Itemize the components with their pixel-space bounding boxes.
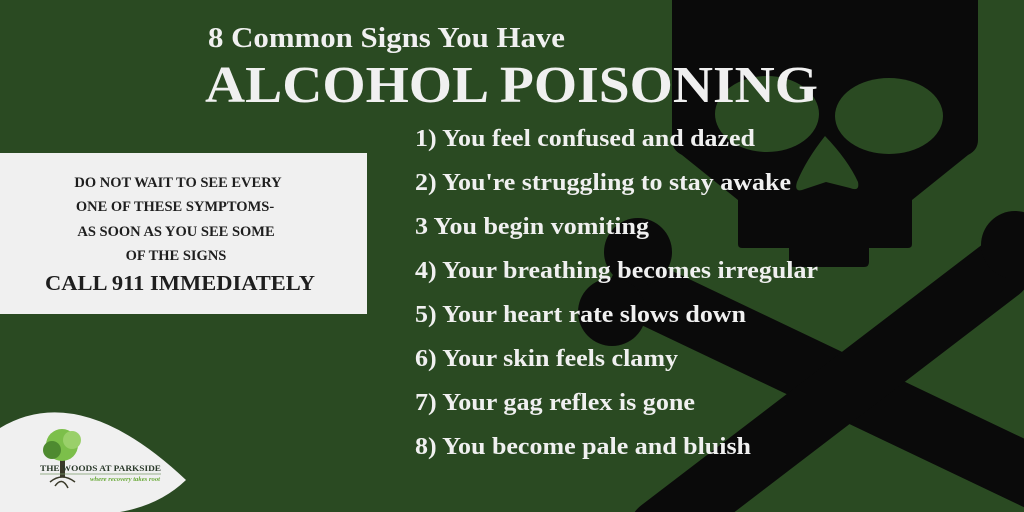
callout: warning box: ONE OF THESE SYMPTOMS- [76,199,274,215]
title: main heading: ALCOHOL POISONING [205,57,818,114]
logo: The Woods at Parkside: THE WOODS AT PARKSIDE [40,463,161,473]
title: subtitle: 8 Common Signs You Have [208,23,565,54]
callout: warning box: DO NOT WAIT TO SEE EVERY [74,175,282,191]
list: signs [415,126,818,460]
callout: warning box: AS SOON AS YOU SEE SOME [77,224,275,240]
icon: skull and crossbones [578,0,1024,512]
list: signs: 7) Your gag reflex is gone [415,390,695,416]
list: signs: 5) Your heart rate slows down [415,302,746,328]
list: signs: 3 You begin vomiting [415,214,649,240]
logo: The Woods at Parkside [0,412,186,512]
callout: warning box [0,153,367,314]
callout: warning box: CALL 911 IMMEDIATELY [45,271,315,295]
list: signs: 8) You become pale and bluish [415,434,751,460]
list: signs: 4) Your breathing becomes irregular [415,258,818,284]
list: signs: 6) Your skin feels clamy [415,346,678,372]
list: signs: 1) You feel confused and dazed [415,126,756,152]
callout: warning box: OF THE SIGNS [126,248,226,264]
list: signs: 2) You're struggling to stay awake [415,170,791,196]
logo: The Woods at Parkside: where recovery takes root [90,476,160,483]
